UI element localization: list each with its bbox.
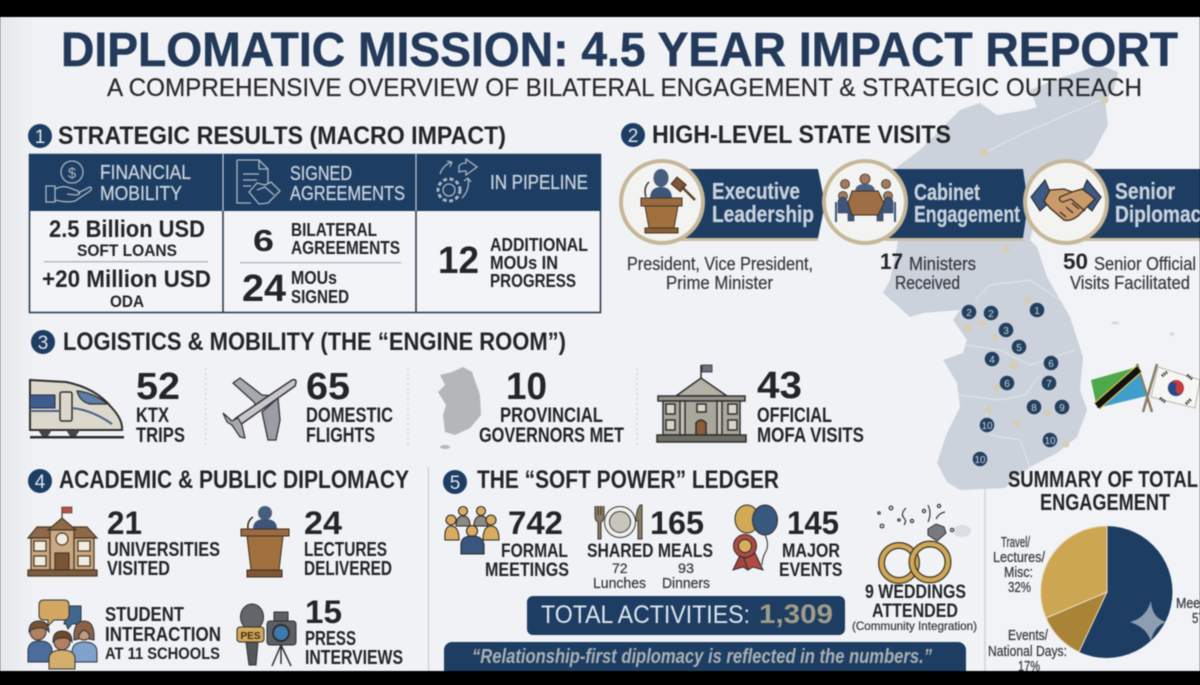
map markers: 7 — [1046, 379, 1052, 390]
stat: major events — [779, 505, 842, 581]
stat: press interviews — [305, 594, 403, 669]
icon: crossed flags — [1091, 364, 1200, 412]
financial values: ODA — [110, 292, 144, 311]
banner: executive leadership — [621, 161, 825, 243]
panel: academic and public diplomacy — [28, 466, 409, 669]
agreements values: BILATERAL — [291, 220, 377, 240]
pipeline values — [438, 235, 588, 291]
financial mobility label: MOBILITY — [100, 183, 182, 205]
panel: soft power ledger — [443, 466, 977, 682]
agreements values: MOUs — [291, 268, 337, 288]
map markers: 10 — [974, 455, 986, 466]
label: Cabinet — [914, 179, 980, 205]
stat: MOFA visits: 43 — [757, 365, 802, 407]
heading: logistics: 3 — [38, 333, 48, 354]
agreements values: AGREEMENTS — [291, 238, 400, 258]
stat: major events: EVENTS — [779, 560, 842, 581]
signed agreements label: SIGNED — [290, 163, 352, 185]
financial values — [42, 216, 211, 311]
financial mobility label: FINANCIAL — [100, 162, 191, 184]
icon: university — [28, 507, 97, 576]
pie label: events: National Days: — [988, 644, 1067, 660]
stat: shared meals: SHARED MEALS — [587, 541, 713, 562]
background map of Korea — [883, 65, 1174, 490]
heading: summary: ENGAGEMENT — [1040, 489, 1170, 515]
map markers: 6 — [1004, 379, 1010, 390]
label — [1115, 178, 1200, 227]
stat: KTX trips: 52 — [136, 366, 180, 408]
stat: shared meals: Dinners — [662, 575, 710, 592]
stat: formal meetings: FORMAL — [501, 541, 568, 562]
signed agreements label — [290, 163, 405, 205]
panel: high-level state visits — [621, 121, 1200, 293]
icon: KTX train — [30, 380, 124, 438]
icon: balloons and rosette — [733, 505, 778, 570]
pipeline values: MOUs IN — [490, 253, 558, 273]
icon: press microphone and camera — [237, 604, 296, 666]
pie label: travel: Travel/ — [1001, 535, 1031, 551]
icon: students talking — [28, 600, 97, 669]
label: Engagement — [914, 201, 1020, 227]
stat: press interviews: PRESS — [305, 628, 356, 650]
map markers: 9 — [1059, 403, 1065, 414]
stat: universities — [107, 505, 220, 580]
pie label: events: 17% — [1018, 659, 1040, 675]
stat: weddings attended — [852, 582, 977, 633]
quote bar: “Relationship-first diplomacy is reflected in the numbers.” — [472, 646, 932, 668]
map markers: 2 — [988, 309, 994, 320]
pie label: travel: Lectures/ — [993, 550, 1046, 566]
stat: student interaction: AT 11 SCHOOLS — [105, 644, 220, 663]
stat: domestic flights: DOMESTIC — [306, 404, 393, 427]
signed agreements label: AGREEMENTS — [290, 183, 405, 205]
total activities bar: 1,309 — [759, 599, 833, 629]
panel: logistics and mobility — [30, 328, 864, 449]
map markers: 3 — [1003, 326, 1009, 337]
caption: executive: President, Vice President, — [627, 254, 813, 274]
pie label: events: Events/ — [1008, 628, 1049, 644]
label: Leadership — [712, 201, 814, 227]
agreements values: 24 — [242, 268, 286, 310]
icon: document and handshake — [237, 160, 280, 204]
stat: domestic flights — [306, 366, 393, 447]
stat: student interaction — [105, 604, 221, 663]
map markers: 2 — [966, 308, 972, 319]
pie chart — [1041, 526, 1172, 658]
heading: soft power: THE “SOFT POWER” LEDGER — [477, 466, 779, 494]
caption: executive: Prime Minister — [666, 273, 773, 293]
heading: state visits: 2 — [628, 126, 638, 147]
stat: universities: UNIVERSITIES — [107, 539, 220, 561]
pie label: travel: Misc: — [1004, 565, 1033, 581]
map markers: 5 — [1016, 343, 1022, 354]
stat: student interaction: STUDENT — [105, 604, 184, 626]
pie label: events — [988, 628, 1067, 675]
pie label: travel: 32% — [1008, 580, 1031, 596]
stat: shared meals — [587, 505, 713, 592]
map markers: 10 — [981, 421, 993, 432]
stat: major events: 145 — [787, 505, 839, 541]
stat: MOFA visits: MOFA VISITS — [757, 424, 864, 447]
pipeline values: 12 — [438, 240, 479, 282]
icon: hand with coin — [46, 161, 92, 202]
label: Executive — [712, 178, 800, 204]
heading: state visits: HIGH-LEVEL STATE VISITS — [652, 121, 951, 149]
in pipeline label: IN PIPELINE — [490, 172, 588, 194]
heading: soft power: 5 — [450, 473, 460, 494]
icon: South Korea silhouette — [438, 367, 481, 449]
caption: senior officials — [1063, 249, 1196, 293]
caption: ministers: Received — [895, 273, 960, 293]
icon: gear and arrows — [438, 159, 477, 201]
stat: shared meals: 93 — [678, 560, 694, 576]
heading: strategic results: STRATEGIC RESULTS (MACRO IMPACT) — [58, 122, 506, 150]
stat: formal meetings: 742 — [508, 505, 563, 541]
financial values: +20 Million USD — [42, 266, 211, 293]
agreements values — [240, 220, 401, 310]
icon: airplane — [223, 378, 296, 440]
icon: lectern — [241, 506, 289, 577]
stat: KTX trips — [136, 366, 185, 447]
pie label: meetings — [1176, 596, 1200, 627]
caption: ministers: Ministers — [909, 254, 976, 274]
caption: ministers: 17 — [880, 249, 903, 274]
map markers — [962, 303, 1069, 466]
stat: press interviews: 15 — [305, 594, 342, 630]
map markers: 1 — [1034, 306, 1040, 317]
map markers: 10 — [1044, 436, 1056, 447]
map markers: 4 — [989, 355, 995, 366]
stat: MOFA visits: OFFICIAL — [757, 404, 832, 427]
stat: shared meals: 72 — [612, 560, 628, 576]
stat: provincial governors: PROVINCIAL — [500, 404, 603, 427]
agreements values: SIGNED — [291, 287, 349, 307]
quote bar — [444, 642, 966, 682]
label — [712, 178, 814, 227]
heading: academic: ACADEMIC & PUBLIC DIPLOMACY — [59, 466, 409, 494]
icon: press microphone and camera: PES — [240, 631, 261, 642]
stat: KTX trips: TRIPS — [136, 424, 185, 447]
stat: provincial governors: GOVERNORS MET — [479, 424, 624, 447]
caption: executive — [627, 254, 813, 293]
stat: weddings attended: 9 WEDDINGS — [865, 582, 966, 603]
icon: handshake — [1031, 180, 1101, 220]
label: Senior — [1115, 178, 1175, 204]
stat: formal meetings: MEETINGS — [485, 560, 569, 581]
financial mobility label — [100, 162, 191, 205]
results table — [29, 154, 601, 313]
stat: KTX trips: KTX — [136, 404, 169, 427]
banner: cabinet engagement — [824, 161, 1028, 243]
total activities bar: TOTAL ACTIVITIES: — [541, 601, 750, 629]
icon: government building — [657, 365, 746, 442]
heading: logistics: LOGISTICS & MOBILITY (THE “ENGINE ROOM”) — [63, 328, 566, 356]
stat: provincial governors: 10 — [506, 366, 547, 408]
stat: formal meetings — [485, 505, 569, 581]
stat: major events: MAJOR — [782, 541, 840, 562]
stat: shared meals: 165 — [650, 505, 704, 541]
heading: strategic results: 1 — [35, 127, 45, 148]
stat: provincial governors — [479, 366, 624, 447]
total activities bar — [527, 596, 845, 635]
agreements values: 6 — [253, 223, 274, 258]
stat: universities: 21 — [107, 505, 142, 541]
stat: lectures: LECTURES — [304, 539, 387, 561]
panel: strategic results — [28, 122, 601, 313]
stat: universities: VISITED — [107, 558, 170, 580]
pie label: travel — [993, 535, 1046, 596]
stat: lectures: DELIVERED — [304, 558, 392, 580]
stat: lectures: 24 — [304, 505, 342, 541]
icon: hand with coin: $ — [68, 165, 77, 182]
heading: academic: 4 — [35, 472, 46, 493]
map markers: 6 — [1048, 359, 1054, 370]
stat: student interaction: INTERACTION — [105, 624, 221, 646]
stat: press interviews: INTERVIEWS — [305, 647, 403, 669]
icon: podium and gavel — [641, 169, 695, 233]
banner: senior diplomacy — [1025, 161, 1200, 243]
subtitle: A COMPREHENSIVE OVERVIEW OF BILATERAL ENGAGEMENT & STRATEGIC OUTREACH — [107, 74, 1142, 102]
stat: domestic flights: FLIGHTS — [306, 424, 375, 447]
caption: senior officials: 50 — [1063, 249, 1088, 274]
caption: ministers — [880, 249, 976, 293]
title: DIPLOMATIC MISSION: 4.5 YEAR IMPACT REPORT — [61, 24, 1178, 77]
map markers: 8 — [1031, 403, 1037, 414]
stat: MOFA visits — [757, 365, 864, 447]
heading: summary — [1008, 466, 1198, 515]
financial values: SOFT LOANS — [77, 241, 177, 260]
caption: senior officials: Visits Facilitated — [1070, 273, 1190, 293]
stat: weddings attended: (Community Integration) — [852, 619, 977, 633]
icon: wedding rings — [878, 504, 971, 580]
panel: summary of total engagement — [988, 466, 1200, 675]
pipeline values: ADDITIONAL — [490, 235, 588, 255]
stat: weddings attended: ATTENDED — [872, 601, 958, 622]
icon: people meeting — [445, 506, 499, 554]
stat: domestic flights: 65 — [306, 366, 350, 408]
icon: plate and cutlery — [595, 505, 642, 539]
icon: meeting table — [836, 174, 895, 222]
financial values: 2.5 Billion USD — [49, 216, 205, 243]
label — [914, 179, 1020, 227]
pipeline values: PROGRESS — [490, 271, 576, 291]
stat: shared meals: Lunches — [593, 575, 646, 592]
stat: lectures — [304, 505, 392, 580]
